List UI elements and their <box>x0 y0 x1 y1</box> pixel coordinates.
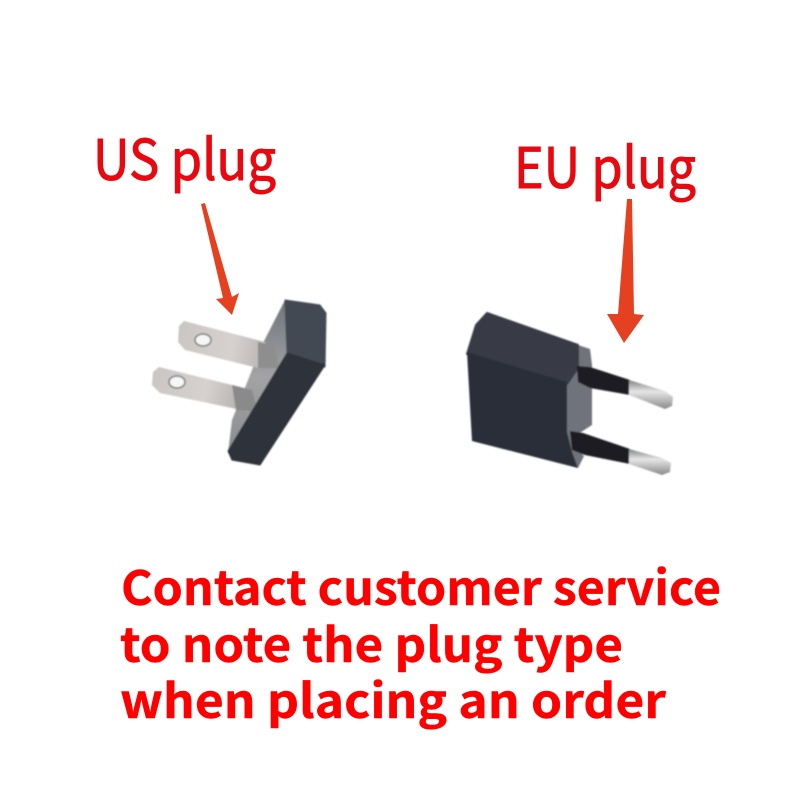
icon: EU plug photo <box>467 313 673 475</box>
line 3: when placing an order <box>120 663 667 732</box>
lower blade <box>152 367 258 412</box>
upper pin <box>577 366 673 409</box>
arrow: EU plug <box>607 199 644 343</box>
line 2: to note the plug type <box>120 607 623 676</box>
text: order note <box>120 550 721 732</box>
plug front face <box>228 353 325 465</box>
icon: US plug photo <box>152 300 326 465</box>
lower pin <box>570 431 671 475</box>
plug body lower <box>467 352 578 468</box>
label: EU plug: EU plug <box>514 124 696 205</box>
plug side face <box>566 345 592 468</box>
upper blade <box>178 321 279 368</box>
line 1: Contact customer service <box>121 550 721 619</box>
plug top face <box>285 300 326 367</box>
plug side face <box>228 300 287 453</box>
label: US plug: US plug <box>93 116 276 197</box>
plug body upper <box>467 313 578 384</box>
arrow: US plug <box>201 203 239 315</box>
